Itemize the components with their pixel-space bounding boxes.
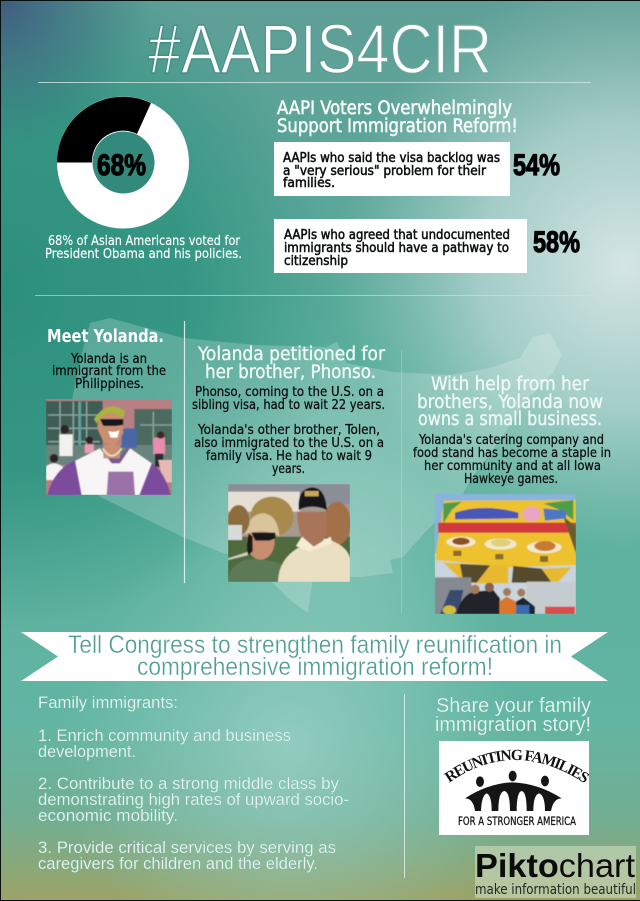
piktochart badge: [475, 846, 636, 898]
donut value: 68%: [97, 149, 146, 182]
title: #AAPIS4CIR: [148, 10, 492, 88]
column 2 text: Yolanda's other brother, Tolen,: [197, 422, 380, 438]
column 3 text: Hawkeye games.: [464, 471, 558, 487]
logo: reuniting families: [439, 741, 590, 835]
column 3 heading: owns a small business.: [418, 409, 602, 430]
stat box: pathway: AAPIs who agreed that undocumented: [284, 227, 510, 243]
stat: 58%: 58%: [533, 226, 580, 259]
heading: voters: AAPI Voters Overwhelmingly: [277, 98, 512, 119]
stat box: pathway: citizenship: [284, 253, 348, 269]
stat box: visa backlog: AAPIs who said the visa backlog was: [283, 150, 500, 166]
column 2 text: years.: [272, 461, 305, 477]
column 1 text: Philippines.: [75, 376, 144, 392]
column 2 text: also immigrated to the U.S. on a: [194, 435, 384, 451]
column 3 text: her community and at all Iowa: [424, 458, 601, 474]
column 1 text: [52, 351, 166, 392]
column 2 text: sibling visa, had to wait 22 years.: [192, 397, 385, 413]
family immigrants list: 3. Provide critical services by serving as: [38, 839, 336, 857]
vertical divider: [404, 694, 406, 878]
banner text: [68, 631, 562, 681]
family immigrants list: [38, 694, 349, 873]
heading: voters: Support Immigration Reform!: [277, 116, 518, 137]
column 2 text: family visa. He had to wait 9: [206, 448, 372, 464]
stat box: visa backlog: [274, 142, 510, 196]
logo: reuniting families: FOR A STRONGER AMERICA: [458, 814, 576, 828]
donut caption: [45, 233, 242, 262]
column 2 heading: her brother, Phonso.: [205, 362, 376, 383]
column 3 heading: [417, 374, 603, 430]
family immigrants list: demonstrating high rates of upward socio-: [38, 791, 349, 809]
share heading: immigration story!: [435, 714, 591, 736]
background map silhouette: [72, 318, 562, 613]
icon: linked figures: [465, 771, 562, 811]
banner text: Tell Congress to strengthen family reunification in: [68, 631, 562, 659]
stat box: visa backlog: families.: [283, 175, 335, 191]
family immigrants list: 1. Enrich community and business: [38, 727, 291, 745]
column 3 text: Yolanda's catering company and: [418, 432, 604, 448]
column 3 heading: brothers, Yolanda now: [417, 392, 603, 413]
family immigrants list: development.: [38, 743, 136, 761]
faint vertical divider: [400, 350, 402, 613]
column 2 text: [192, 384, 385, 477]
stat box: pathway: [274, 219, 527, 273]
banner ribbon: [21, 631, 608, 681]
logo: reuniting families: REUNITING FAMILIES: [444, 750, 590, 783]
heading: voters: [277, 98, 518, 137]
divider: [35, 294, 590, 296]
photo: Yolanda: [46, 399, 172, 495]
banner text: comprehensive immigration reform!: [137, 653, 493, 681]
stat: 54%: 54%: [513, 149, 560, 182]
share heading: [435, 695, 591, 736]
photo: Yolanda and Phonso: [228, 484, 351, 582]
piktochart badge: Piktochart: [475, 847, 635, 884]
photo: food stand: [435, 494, 576, 615]
family immigrants list: caregivers for children and the elderly.: [38, 855, 318, 873]
vertical divider: [184, 321, 186, 583]
share heading: Share your family: [436, 695, 591, 717]
divider: [38, 82, 591, 84]
family immigrants list: 2. Contribute to a strong middle class by: [38, 775, 340, 793]
column 1 heading: Meet Yolanda.: [47, 326, 164, 347]
family immigrants list: economic mobility.: [38, 807, 178, 825]
column 2 heading: Yolanda petitioned for: [197, 344, 385, 365]
donut caption: 68% of Asian Americans voted for: [48, 233, 240, 249]
family immigrants list: Family immigrants:: [38, 694, 178, 712]
column 2 heading: [197, 344, 385, 383]
column 2 text: Phonso, coming to the U.S. on a: [195, 384, 384, 400]
column 3 text: food stand has become a staple in: [413, 445, 611, 461]
stat box: visa backlog: a "very serious" problem for their: [283, 163, 486, 179]
column 1 text: Yolanda is an: [70, 351, 147, 367]
column 1 text: immigrant from the: [52, 363, 166, 379]
donut caption: President Obama and his policies.: [45, 246, 242, 262]
stat box: pathway: immigrants should have a pathway to: [284, 240, 509, 256]
donut chart: 68%: [57, 96, 189, 228]
column 3 text: [413, 432, 611, 487]
column 3 heading: With help from her: [431, 374, 589, 395]
